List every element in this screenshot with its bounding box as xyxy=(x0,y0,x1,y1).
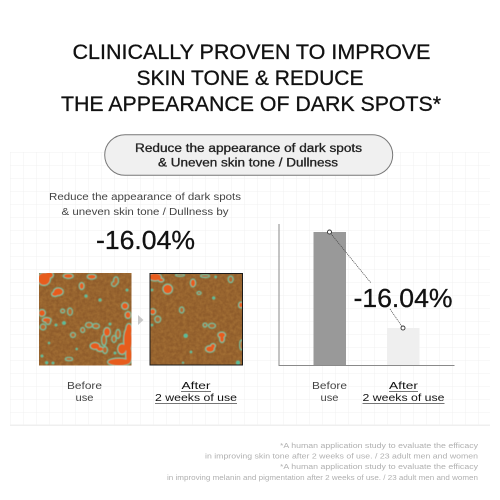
left label: after xyxy=(155,380,237,404)
arrow between images xyxy=(138,315,144,325)
left label: after: 2 weeks of use xyxy=(155,392,237,404)
bar chart xyxy=(279,224,454,366)
skin image: after xyxy=(149,273,243,366)
chart label: before: Before xyxy=(312,380,347,392)
footnotes: *A human application study to evaluate the efficacy xyxy=(280,462,478,471)
chart label: before xyxy=(312,380,347,404)
footnotes xyxy=(167,441,478,482)
pill heading: Reduce the appearance of dark spots xyxy=(135,143,362,155)
left label: after: After xyxy=(182,380,211,392)
title: THE APPEARANCE OF DARK SPOTS* xyxy=(61,92,442,116)
before bar xyxy=(314,232,346,365)
title xyxy=(61,40,442,116)
footnotes: in improving skin tone after 2 weeks of use. / 23 adult men and women xyxy=(205,452,478,460)
pill heading: & Uneven skin tone / Dullness xyxy=(158,158,338,170)
title: SKIN TONE & REDUCE xyxy=(136,66,364,90)
connector markers xyxy=(328,230,405,330)
left panel description: & uneven skin tone / Dullness by xyxy=(62,207,228,218)
axes xyxy=(279,224,454,366)
chart label: after xyxy=(362,380,445,404)
left percentage: -16.04% xyxy=(96,225,195,255)
left label: before: Before xyxy=(67,380,102,392)
pill heading xyxy=(105,135,393,175)
chart percentage: -16.04% xyxy=(354,283,452,313)
left label: before xyxy=(67,380,102,404)
footnotes: in improving melanin and pigmentation after 2 weeks of use. / 23 adult men and women xyxy=(167,473,478,482)
left panel description: Reduce the appearance of dark spots xyxy=(49,192,241,203)
connector line xyxy=(330,232,403,328)
skin image: before xyxy=(38,272,132,366)
footnotes: *A human application study to evaluate the efficacy xyxy=(280,441,478,450)
left label: before: use xyxy=(76,392,94,404)
after bar xyxy=(387,328,420,365)
chart label: before: use xyxy=(320,392,339,404)
title: CLINICALLY PROVEN TO IMPROVE xyxy=(72,40,430,64)
chart label: after: 2 weeks of use xyxy=(362,392,445,404)
left panel description xyxy=(49,192,241,218)
chart label: after: After xyxy=(389,380,419,392)
